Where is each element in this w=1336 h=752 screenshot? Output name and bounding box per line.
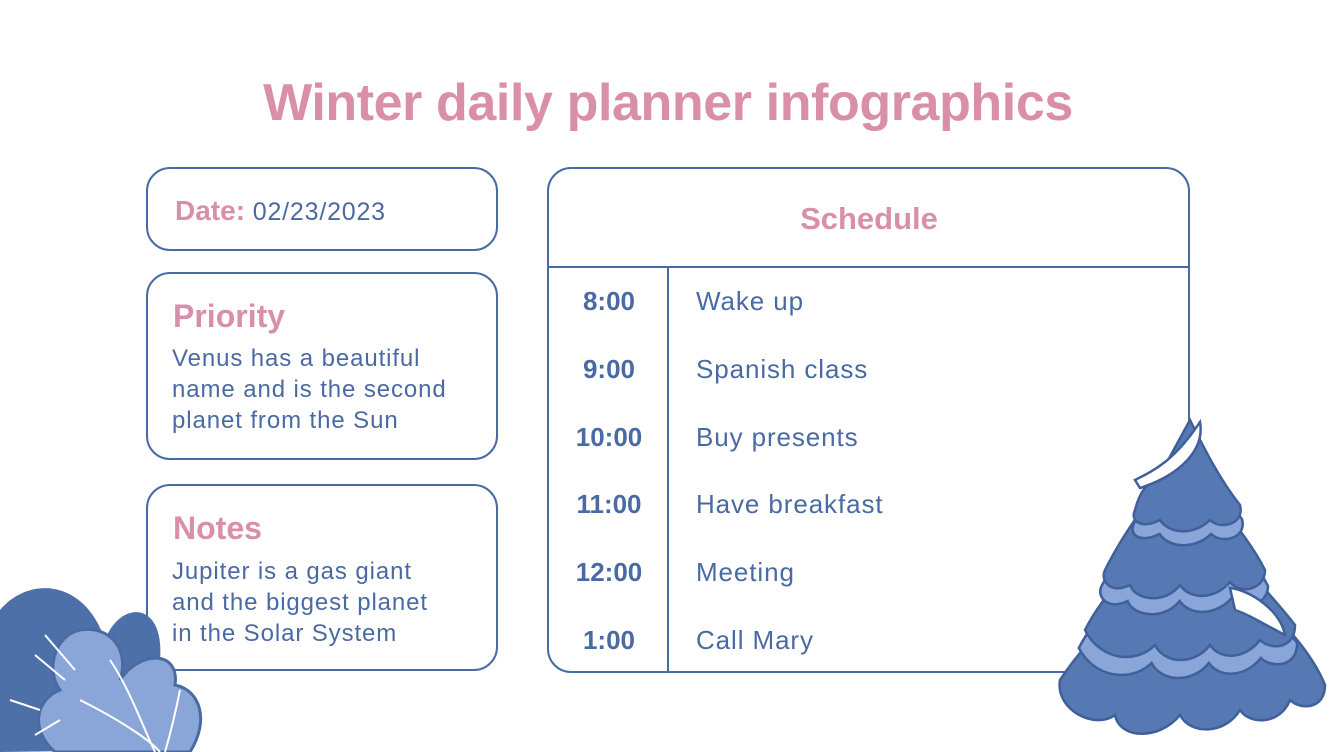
notes heading: Notes [173,510,262,546]
schedule rows: 10:00 [576,422,642,452]
title: Winter daily planner infographics [263,74,1073,132]
schedule rows: 12:00 [576,557,642,587]
panel: date [146,167,498,251]
schedule rows: Wake up [696,286,804,316]
schedule rows: Have breakfast [696,489,883,519]
icon: leaves [0,588,202,752]
schedule rows: 8:00 [583,286,635,316]
priority heading: Priority [173,298,285,334]
schedule rows: 11:00 [576,489,642,519]
schedule heading: Schedule [800,201,938,236]
notes text: Jupiter is a gas giant [172,558,412,585]
priority text: name and is the second [172,376,447,403]
icon: snowy tree [1058,417,1326,735]
priority text [172,345,447,434]
panel: schedule [547,167,1190,673]
schedule rows: Buy presents [696,422,859,452]
notes text: and the biggest planet [172,589,428,616]
panel: priority [146,272,498,460]
priority text: Venus has a beautiful [172,345,420,372]
schedule rows: Meeting [696,557,795,587]
panel: notes [146,484,498,671]
notes text [172,558,428,647]
schedule rows [576,286,883,655]
schedule rows: Call Mary [696,625,814,655]
panel: date: Date: 02/23/2023 [175,195,386,226]
priority text: planet from the Sun [172,407,399,434]
schedule rows: 9:00 [583,354,635,384]
notes text: in the Solar System [172,620,397,647]
schedule rows: Spanish class [696,354,868,384]
schedule rows: 1:00 [583,625,635,655]
